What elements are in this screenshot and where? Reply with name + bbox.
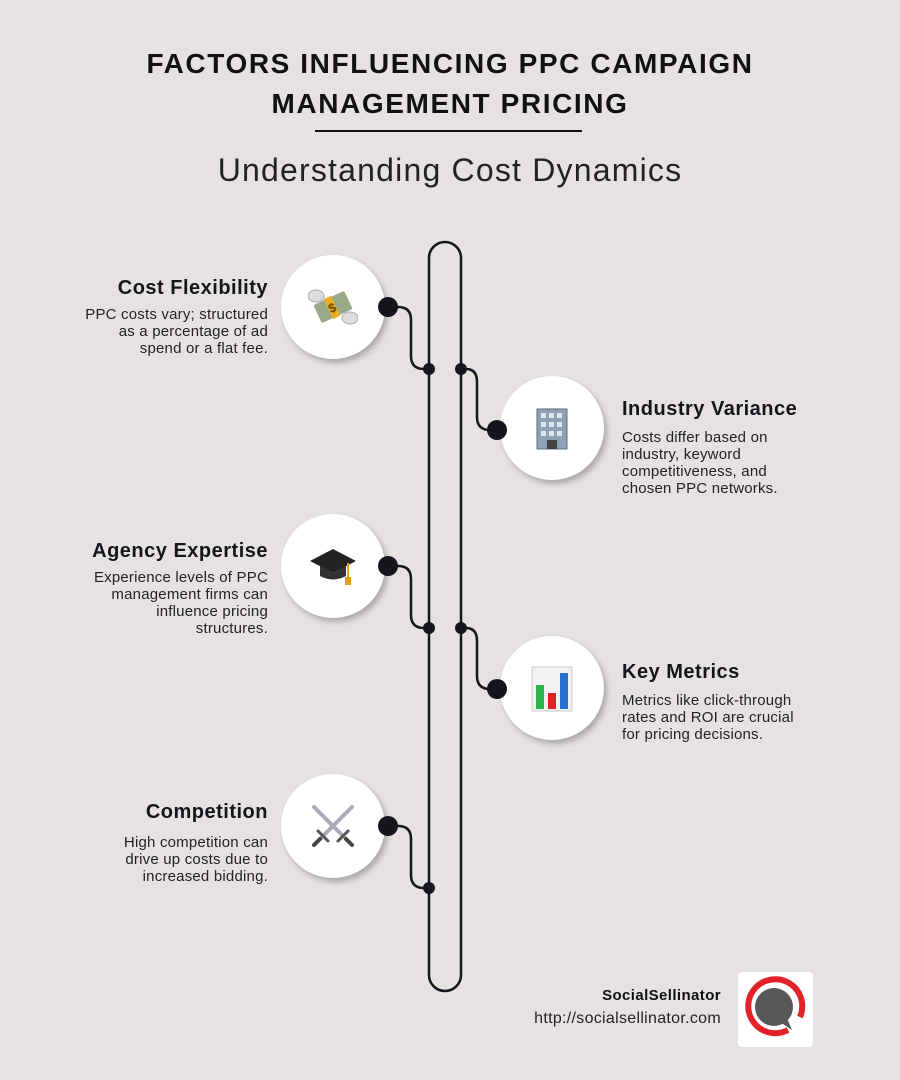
text: management firms can: [111, 586, 268, 603]
title underline: [315, 130, 582, 132]
subtitle: Understanding Cost Dynamics: [218, 152, 682, 188]
icon: money: $: [326, 299, 339, 316]
text: as a percentage of ad: [119, 323, 268, 340]
text: influence pricing: [156, 603, 268, 620]
text: PPC costs vary; structured: [85, 306, 268, 323]
footer brand: SocialSellinator: [602, 987, 721, 1004]
item: key metrics: [487, 636, 794, 747]
icon: graduation cap: [281, 514, 385, 618]
text: Costs differ based on: [622, 429, 768, 446]
text: rates and ROI are crucial: [622, 709, 794, 726]
text: Cost Flexibility: [118, 277, 268, 299]
text: competitiveness, and: [622, 463, 767, 480]
text: High competition can: [124, 834, 268, 851]
text: Key Metrics: [622, 661, 740, 683]
text: structures.: [196, 620, 268, 637]
logo: [738, 972, 813, 1047]
text: drive up costs due to: [125, 851, 268, 868]
icon: bar chart: [500, 636, 604, 740]
item: competition: [124, 774, 398, 885]
title: FACTORS INFLUENCING PPC CAMPAIGN: [146, 48, 754, 79]
text: Experience levels of PPC: [94, 569, 268, 586]
text: spend or a flat fee.: [140, 340, 268, 357]
text: increased bidding.: [143, 868, 268, 885]
text: for pricing decisions.: [622, 726, 763, 743]
text: chosen PPC networks.: [622, 480, 778, 497]
title: [146, 48, 754, 119]
item: cost flexibility: [85, 255, 398, 366]
item: agency expertise: [92, 514, 398, 637]
icon: crossed swords: [281, 774, 385, 878]
item: industry variance: [487, 376, 797, 497]
footer brand: http://socialsellinator.com: [534, 1010, 721, 1027]
icon: money: [281, 255, 385, 359]
icon: building: [500, 376, 604, 480]
text: Industry Variance: [622, 398, 797, 420]
footer brand: [534, 987, 721, 1027]
text: Competition: [146, 801, 268, 823]
text: Metrics like click-through: [622, 692, 791, 709]
text: industry, keyword: [622, 446, 741, 463]
title: MANAGEMENT PRICING: [271, 88, 629, 119]
text: Agency Expertise: [92, 540, 268, 562]
